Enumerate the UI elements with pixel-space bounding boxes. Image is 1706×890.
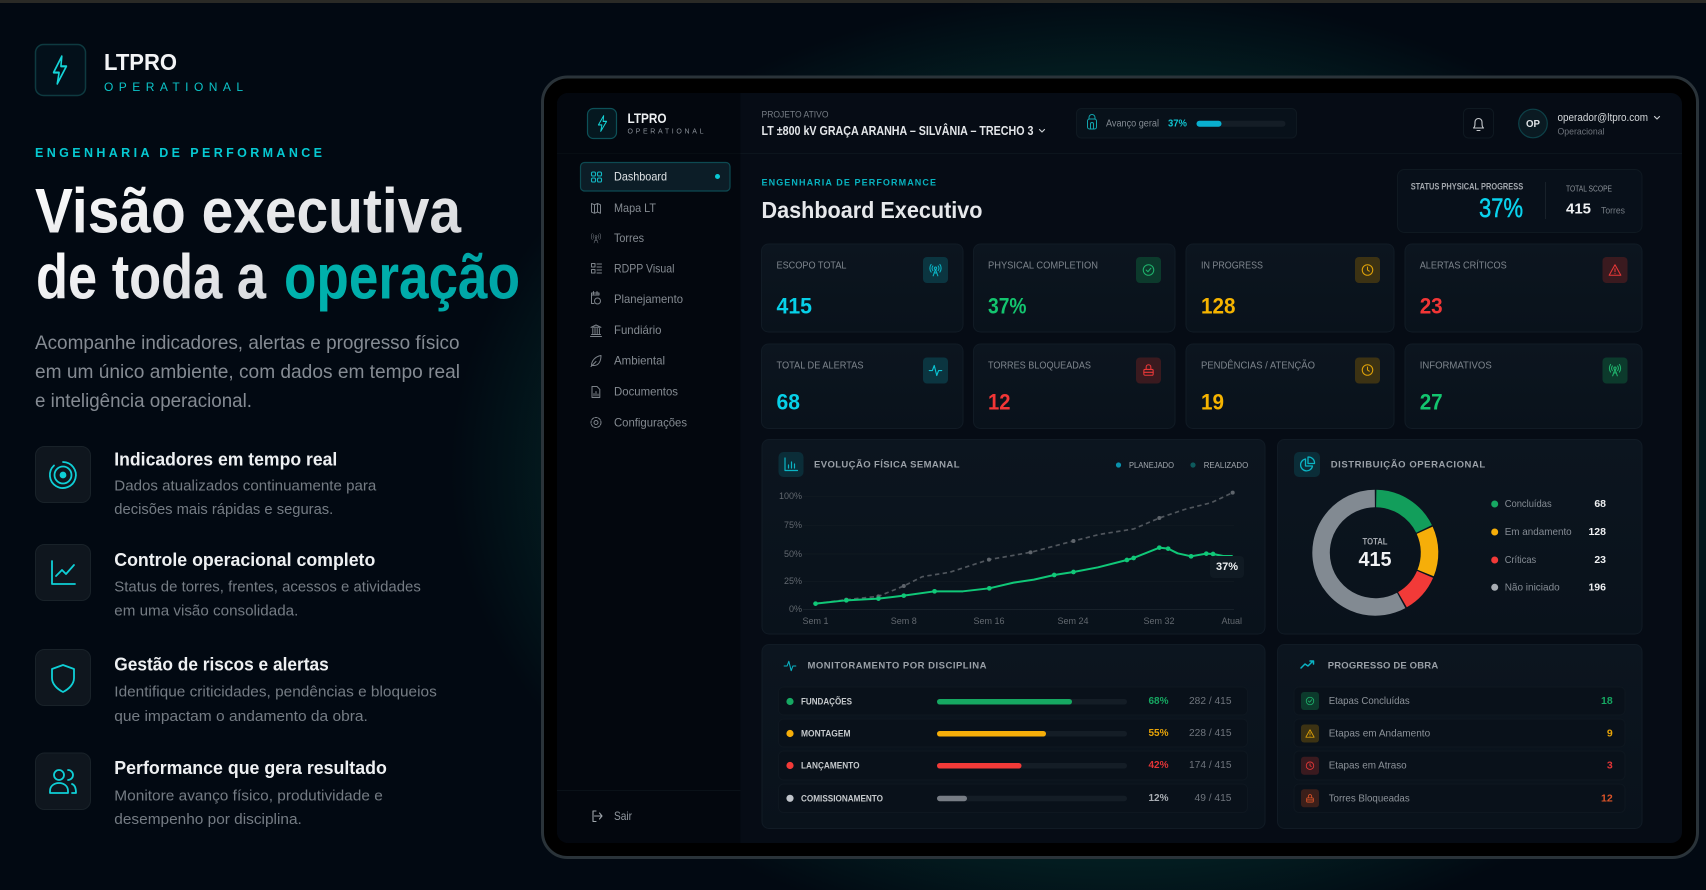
feature description: Status de torres, frentes, acessos e atividades [114,578,421,596]
line chart: 25% [784,576,802,586]
feature description: Dados atualizados continuamente para [114,478,377,494]
feature description: que impactam o andamento da obra. [114,708,368,725]
overall progress pill: 37% [1168,118,1187,130]
row: lancamento [778,751,1248,780]
realized green line [813,545,1233,606]
user avatar: OP [1526,118,1540,130]
donut legend: Críticas [1505,554,1536,566]
KPI card: physical completion: 37% [988,294,1026,318]
eyebrow: ENGENHARIA DE PERFORMANCE [762,178,936,188]
feature description: Monitore avanço físico, produtividade e [114,788,383,804]
user info [1558,112,1660,138]
row: etapas em atraso: Etapas em Atraso [1329,760,1407,772]
donut legend: Em andamento [1505,526,1572,538]
feature: riscos [36,650,437,725]
row: etapas em andamento [1294,719,1625,747]
row: comissionamento: 49 / 415 [1194,793,1232,804]
feature description: em uma visão consolidada. [114,602,298,620]
KPI card: escopo total [762,244,963,332]
line chart: 100% [779,491,802,501]
feature description [114,788,383,828]
row: lancamento: 174 / 415 [1189,760,1232,771]
nav items: Fundiário [614,323,662,337]
nav items: RDPP Visual [614,262,674,276]
feature description: desempenho por disciplina. [114,811,302,828]
row: fundacoes: 282 / 415 [1189,696,1232,707]
row: fundacoes: 68% [1148,696,1169,707]
overall progress pill: Avanço geral [1106,118,1159,130]
KPI card: escopo total: ESCOPO TOTAL [776,260,847,272]
feature title: Controle operacional completo [114,549,375,570]
brand logo [36,44,243,96]
status summary box: 37% [1479,193,1523,223]
panel title: DISTRIBUIÇÃO OPERACIONAL [1331,460,1485,470]
row: comissionamento [778,784,1248,812]
hero heading block [35,146,520,312]
row: torres bloqueadas: Torres Bloqueadas [1329,792,1410,804]
donut legend: Não iniciado [1505,581,1560,593]
headline highlight: operação [284,242,520,312]
chart legend: PLANEJADO [1129,460,1174,470]
panel: progresso de obra [1278,644,1642,828]
KPI card: total de alertas: TOTAL DE ALERTAS [776,360,864,372]
hero paragraph: e inteligência operacional. [35,390,252,412]
feature title: Gestão de riscos e alertas [114,654,329,674]
row: etapas concluidas: Etapas Concluídas [1329,695,1410,707]
sidebar background [740,153,1682,154]
KPI card: informativos: INFORMATIVOS [1420,360,1492,372]
row: fundacoes [778,687,1248,715]
hero paragraph: Acompanhe indicadores, alertas e progresso físico [35,332,460,354]
KPI card: physical completion [974,244,1175,332]
feature title: Indicadores em tempo real [114,448,337,470]
sidebar [557,93,1682,843]
line chart: Sem 24 [1057,616,1089,626]
status summary box: 415 [1566,200,1591,218]
nav item: sair: Sair [614,809,632,823]
feature description [114,578,421,620]
KPI card: torres bloqueadas: TORRES BLOQUEADAS [988,360,1091,372]
nav items: Planejamento [614,292,683,306]
donut legend: 68 [1594,498,1606,510]
feature: performance [36,753,387,828]
feature description [114,478,377,518]
sidebar brand tagline: OPERATIONAL [628,128,704,136]
donut chart: 415 [1358,549,1392,571]
nav items: Ambiental [614,354,665,368]
feature description: Identifique criticidades, pendências e bloqueios [114,684,437,700]
overall progress pill [1076,108,1296,138]
line chart: 50% [784,549,802,559]
feature description: decisões mais rápidas e seguras. [114,501,333,518]
nav item active: dashboard [580,162,730,191]
project selector: LT ±800 kV GRAÇA ARANHA – SILVÂNIA – TRECHO 3 [762,123,1034,138]
donut legend: 196 [1588,581,1606,593]
panel icon [784,661,796,671]
KPI card: escopo total: 415 [776,294,812,318]
nav item: sair [593,809,632,823]
icon: people [36,753,90,810]
row: comissionamento: 12% [1148,793,1169,804]
chart tooltip: 37% [1216,561,1238,573]
user avatar [1519,109,1547,138]
line chart: Sem 1 [802,616,829,626]
KPI card: informativos: 27 [1420,390,1443,414]
nav item active: dashboard: Dashboard [614,170,667,184]
panel icon [778,452,804,477]
row: montagem: MONTAGEM [801,729,850,739]
panel title: PROGRESSO DE OBRA [1328,660,1438,672]
line chart [779,491,1244,626]
dashboard title: Dashboard Executivo [762,197,982,223]
icon: target [36,446,90,502]
status summary box: Torres [1601,206,1625,216]
KPI card: pendencias [1186,344,1394,428]
nav items: Torres [614,231,644,245]
row: fundacoes: FUNDAÇÕES [801,697,852,707]
sidebar brand name: LTPRO [628,110,667,126]
nav items: Mapa LT [614,201,657,215]
KPI card: alertas criticos: ALERTAS CRÍTICOS [1420,258,1507,272]
KPI card: in progress: 128 [1201,294,1236,318]
row: montagem: 228 / 415 [1189,728,1232,739]
page heading [762,178,982,223]
KPI card: total de alertas [762,344,963,428]
row: etapas concluidas: 18 [1601,695,1613,707]
notification bell [1464,108,1494,138]
planned dashed line [816,491,1235,604]
sidebar logo [588,108,616,138]
line chart: Atual [1221,616,1242,626]
brand name: LTPRO [104,49,177,75]
donut legend [1491,498,1606,593]
KPI card: total de alertas: 68 [776,390,800,414]
KPI card: in progress: IN PROGRESS [1201,260,1263,272]
donut legend: 128 [1588,526,1606,538]
row: etapas em andamento: Etapas em Andamento [1329,728,1430,740]
status summary box [1398,170,1642,232]
eyebrow: ENGENHARIA DE PERFORMANCE [35,146,322,160]
feature description [114,684,437,725]
project selector [762,110,1044,138]
panel: distribuicao operacional [1278,440,1642,634]
row: etapas em andamento: 9 [1607,728,1613,740]
panel title: EVOLUÇÃO FÍSICA SEMANAL [814,460,960,470]
screen main background [557,93,1682,843]
status summary box: TOTAL SCOPE [1566,184,1612,194]
donut legend: 23 [1594,554,1606,566]
chart tooltip [1210,556,1244,578]
row: torres bloqueadas [1294,784,1625,812]
line chart: Sem 32 [1143,616,1175,626]
user info: operador@ltpro.com [1558,112,1648,124]
status summary box: STATUS PHYSICAL PROGRESS [1411,182,1523,192]
nav items: Configurações [614,416,687,430]
hero paragraph: em um único ambiente, com dados em tempo real [35,361,460,383]
brand tagline: OPERATIONAL [104,80,243,94]
donut chart [1321,498,1430,607]
line chart: 0% [789,604,802,614]
device frame [542,77,1698,858]
line chart: 75% [784,520,802,530]
KPI card: informativos [1405,344,1642,428]
panel: evolucao fisica semanal [762,440,1265,634]
feature: controle [36,544,421,620]
panel title: MONITORAMENTO POR DISCIPLINA [808,660,987,672]
KPI card: alertas criticos [1405,244,1642,332]
KPI card: pendencias: PENDÊNCIAS / ATENÇÃO [1201,358,1315,372]
icon: line chart [36,544,90,600]
hero paragraph [35,332,460,412]
KPI card: in progress [1186,244,1394,332]
panel icon [1294,452,1320,477]
row: lancamento: 42% [1148,760,1169,771]
row: etapas em atraso: 3 [1607,760,1613,772]
user info: Operacional [1558,126,1604,138]
nav icons [590,204,602,428]
nav items [614,201,687,430]
headline line 1: Visão executiva [35,176,462,246]
nav items: Documentos [614,385,678,399]
line chart: Sem 8 [891,616,917,626]
project selector: PROJETO ATIVO [762,110,828,120]
KPI card: alertas criticos: 23 [1420,294,1443,318]
feature title: Performance que gera resultado [114,757,387,778]
donut chart: TOTAL [1362,537,1388,547]
row: montagem: 55% [1148,728,1169,739]
row: lancamento: LANÇAMENTO [801,761,860,771]
KPI card: physical completion: PHYSICAL COMPLETION [988,260,1098,272]
KPI card: torres bloqueadas [974,344,1175,428]
chart legend [1116,460,1249,470]
panel icon [1301,661,1314,668]
donut legend: Concluídas [1505,498,1552,510]
KPI card: torres bloqueadas: 12 [988,390,1010,414]
top bar [762,108,1660,138]
line chart: Sem 16 [973,616,1005,626]
icon: lightning logo [36,44,86,96]
row: comissionamento: COMISSIONAMENTO [801,793,883,803]
chart legend: REALIZADO [1204,460,1249,470]
feature: indicadores [36,446,377,518]
panel: monitoramento por disciplina [762,644,1265,828]
row: etapas em atraso [1294,751,1625,780]
KPI card: pendencias: 19 [1201,390,1224,414]
row: torres bloqueadas: 12 [1601,792,1613,804]
icon: shield [36,650,90,706]
row: montagem [778,719,1248,747]
headline line 2: de toda a [36,242,267,312]
row: etapas concluidas [1294,687,1625,715]
